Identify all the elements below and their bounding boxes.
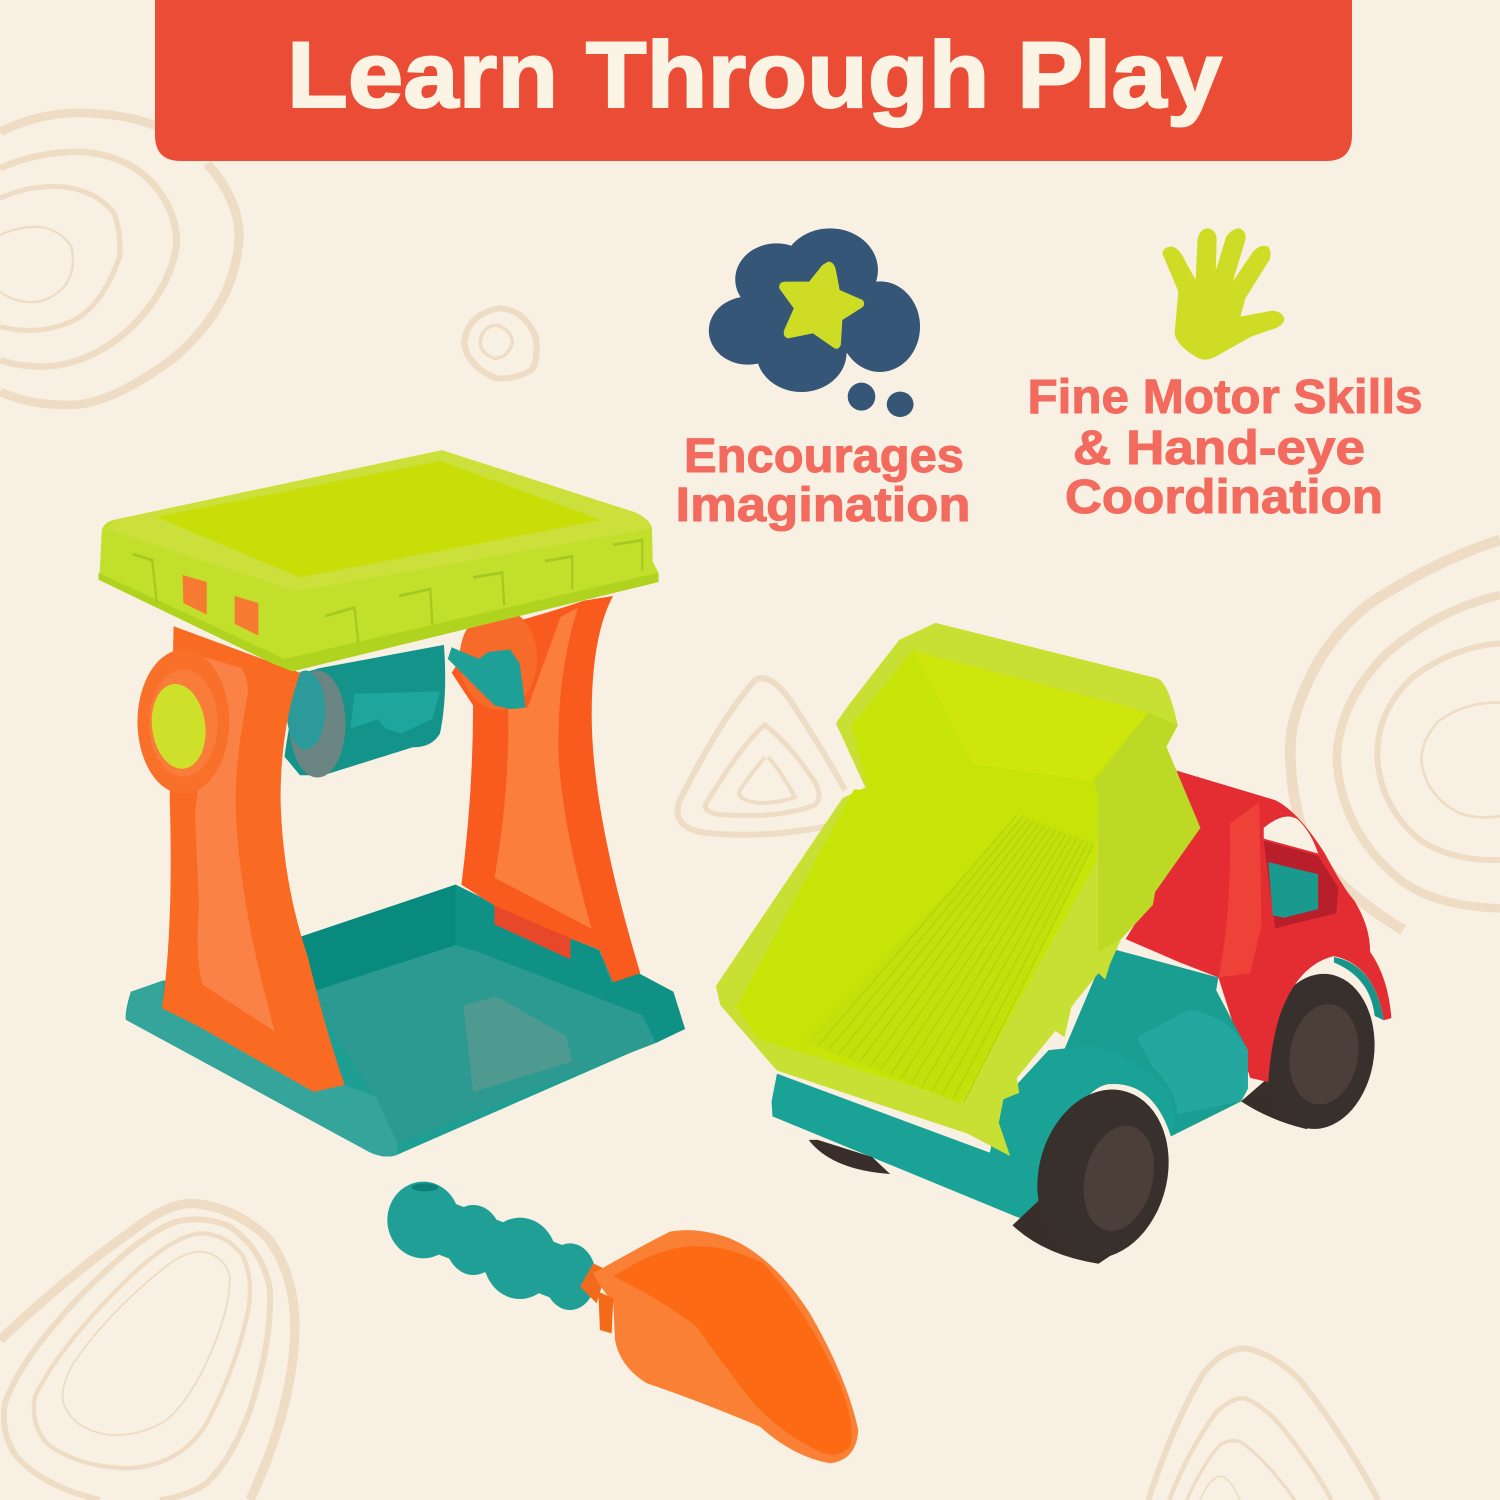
truck chassis — [772, 948, 1248, 1225]
toy: sand and water mill — [99, 450, 685, 1157]
mill yellow button — [145, 678, 212, 775]
toy: sand scoop — [387, 1182, 858, 1463]
mill top tray — [99, 450, 659, 671]
truck rear wheel — [1241, 969, 1383, 1134]
icon: hand print — [1162, 228, 1284, 360]
title: Learn Through Play — [287, 22, 1222, 127]
scoop handle — [387, 1182, 607, 1310]
truck front wheel — [1012, 1078, 1185, 1270]
truck red cab — [1126, 770, 1391, 1082]
title banner — [155, 0, 1352, 161]
text: encourages imagination — [676, 430, 970, 532]
mill right leg — [452, 596, 640, 982]
icon: thought cloud with star — [709, 228, 920, 417]
text: fine motor skills and hand-eye coordination — [1028, 371, 1422, 524]
truck hidden rear wheel — [809, 1140, 890, 1174]
toy: dump truck — [716, 623, 1391, 1270]
mill water wheel — [284, 645, 445, 778]
text: fine motor skills and hand-eye coordination: Coordination — [1065, 471, 1383, 524]
text: fine motor skills and hand-eye coordination: & Hand-eye — [1073, 422, 1365, 475]
text: encourages imagination: Encourages — [684, 430, 964, 483]
text: fine motor skills and hand-eye coordination: Fine Motor Skills — [1028, 371, 1422, 424]
mill handle — [448, 647, 526, 709]
mill base — [126, 885, 685, 1157]
mill left leg — [137, 626, 345, 1092]
scoop blade — [593, 1230, 858, 1463]
text: encourages imagination: Imagination — [676, 479, 970, 532]
truck dump bed — [716, 623, 1200, 1156]
